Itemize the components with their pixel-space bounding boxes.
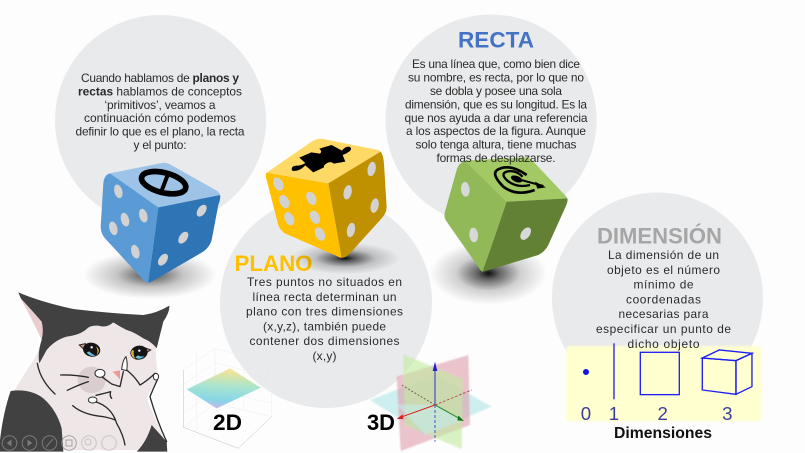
recta text: su nombre, es recta, por lo que no bbox=[408, 70, 584, 84]
cat dark right patch bbox=[137, 425, 167, 452]
cat face details bbox=[37, 341, 167, 445]
dimension text: mínimo de bbox=[634, 278, 694, 292]
presenter controls bbox=[2, 436, 116, 450]
illustration: cat bbox=[0, 292, 169, 452]
cat dark body patch bbox=[0, 390, 63, 452]
plano text: contener dos dimensiones bbox=[250, 334, 400, 348]
dimension text: coordenadas bbox=[626, 292, 701, 306]
plano text: línea recta determinan un bbox=[252, 290, 396, 304]
plano text: plano con tres dimensiones bbox=[246, 305, 403, 319]
intro text: ‘primitivos’, veamos a bbox=[104, 98, 216, 112]
panel: dimensions diagram: 0 bbox=[581, 403, 591, 424]
intro text: continuación cómo podemos bbox=[84, 111, 236, 125]
caption: dimensiones: Dimensiones bbox=[614, 425, 712, 442]
chart: 2D surface plot bbox=[183, 348, 272, 448]
plano text bbox=[246, 275, 403, 363]
recta text: formas de desplazarse. bbox=[436, 151, 556, 165]
intro text bbox=[76, 71, 245, 152]
heading: plano: PLANO bbox=[234, 251, 312, 276]
recta text: que nos ayuda a dar una referencia bbox=[404, 111, 588, 125]
intro text: y el punto: bbox=[134, 138, 186, 152]
icon: blue die bbox=[83, 163, 220, 299]
heading: dimension: DIMENSIÓN bbox=[597, 224, 722, 248]
intro text: definir lo que es el plano, la recta bbox=[76, 125, 245, 139]
panel: recta circle bbox=[386, 14, 596, 226]
panel: plano circle bbox=[220, 196, 432, 408]
intro text: rectas hablamos de conceptos bbox=[78, 84, 242, 98]
panel: dimensions diagram: 1 bbox=[609, 403, 619, 424]
plano text: (x,y,z), también puede bbox=[263, 319, 386, 333]
chart: 3D planes and axes bbox=[370, 354, 492, 451]
dimension text: dicho objeto bbox=[628, 337, 700, 351]
label: 2D: 2D bbox=[213, 410, 242, 435]
plano text: (x,y) bbox=[312, 349, 337, 363]
cat dark head patch bbox=[18, 292, 169, 363]
icon: yellow die bbox=[266, 139, 400, 274]
dimension text bbox=[596, 248, 731, 351]
recta text: se dobla y posee una sola bbox=[430, 84, 562, 98]
dimension text: necesarias para bbox=[618, 307, 709, 321]
recta text: solo tenga altura, tiene muchas bbox=[416, 138, 577, 152]
panel: dimension circle bbox=[552, 192, 763, 404]
recta text: dimensión, que es su longitud. Es la bbox=[405, 97, 587, 111]
recta text bbox=[404, 57, 588, 165]
heading: recta: RECTA bbox=[458, 28, 534, 52]
recta text: Es una línea que, como bien dice bbox=[412, 57, 580, 71]
cat ear bbox=[21, 298, 43, 340]
label: 3D: 3D bbox=[367, 410, 395, 435]
intro text: Cuando hablamos de planos y bbox=[81, 71, 239, 85]
dimension text: La dimensión de un bbox=[608, 248, 719, 262]
dimension text: especificar un punto de bbox=[596, 322, 731, 336]
dimension text: objeto es el número bbox=[607, 263, 720, 277]
panel: dimensions diagram: 3 bbox=[722, 403, 732, 424]
icon: green die bbox=[430, 157, 568, 305]
panel: intro circle bbox=[55, 15, 266, 226]
panel: dimensions diagram bbox=[566, 343, 761, 424]
panel: dimensions diagram: 2 bbox=[657, 403, 668, 424]
recta text: a los aspectos de la figura. Aunque bbox=[406, 124, 586, 138]
plano text: Tres puntos no situados en bbox=[247, 275, 402, 289]
